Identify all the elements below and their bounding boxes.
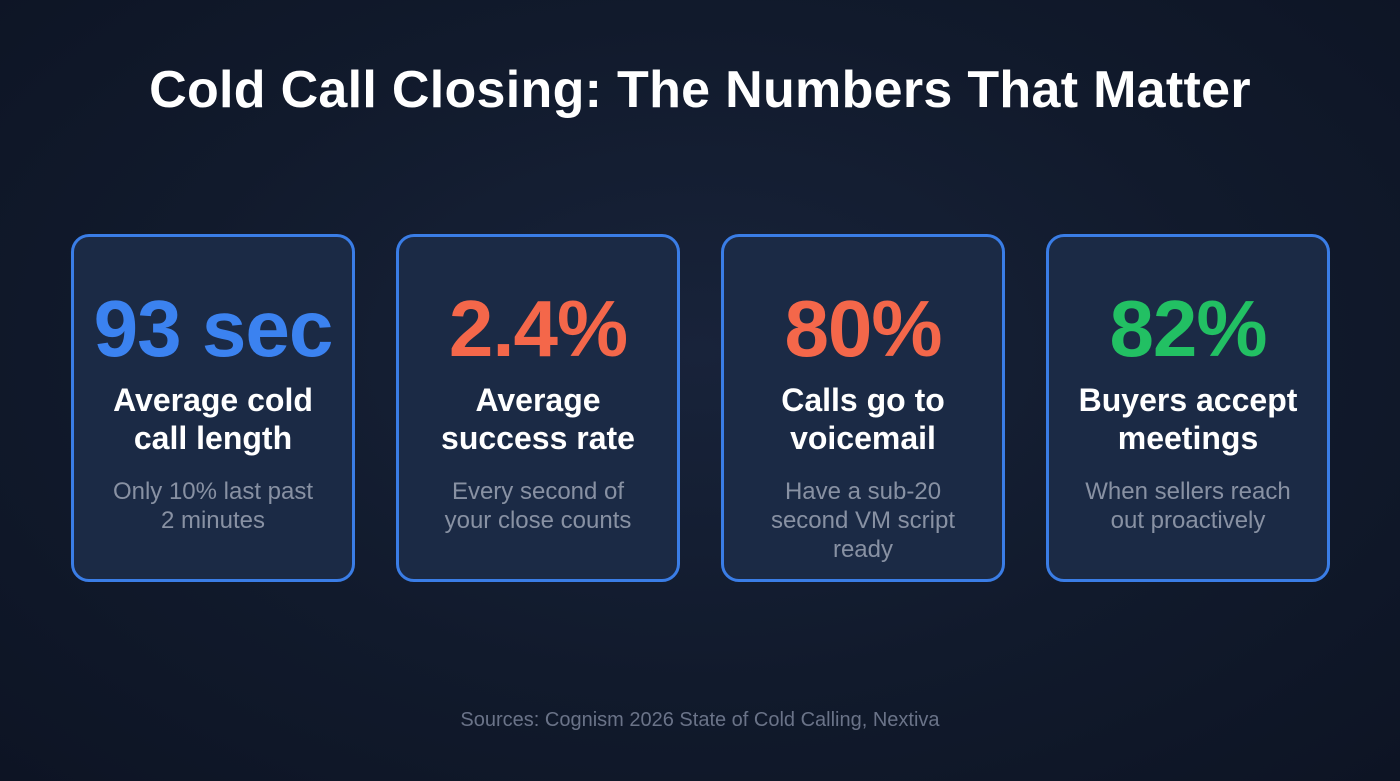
stat note: Every second of [452, 478, 624, 505]
stat number: 93 sec [94, 284, 332, 373]
stat label: call length [134, 420, 292, 456]
card: success rate [396, 234, 680, 582]
stat label [781, 382, 945, 456]
stat note: ready [833, 536, 893, 563]
stat label: Calls go to [781, 382, 945, 418]
stat note: your close counts [445, 507, 631, 534]
stat note: out proactively [1111, 507, 1265, 534]
stat label [1079, 382, 1298, 456]
card: call length [71, 234, 355, 582]
stat label: success rate [441, 420, 635, 456]
stat label [113, 382, 313, 456]
stat note: Only 10% last past [113, 478, 313, 505]
stat note: 2 minutes [161, 507, 265, 534]
stat number: 80% [784, 284, 942, 373]
title: Cold Call Closing: The Numbers That Matter [149, 61, 1251, 119]
stat note [444, 478, 631, 534]
card: voicemail [721, 234, 1005, 582]
stat number: 2.4% [449, 284, 627, 373]
card: meetings [1046, 234, 1330, 582]
stat label [441, 382, 635, 456]
stat note: Have a sub-20 [785, 478, 941, 505]
stat label: voicemail [790, 420, 936, 456]
stat label: Buyers accept [1079, 382, 1297, 418]
stat number: 82% [1109, 284, 1267, 373]
stat note [113, 478, 313, 534]
stat label: Average cold [113, 382, 313, 418]
stat note [1085, 478, 1291, 534]
stat label: meetings [1118, 420, 1258, 456]
sources: Sources: Cognism 2026 State of Cold Calling, Nextiva [460, 709, 940, 731]
stat note: second VM script [771, 507, 955, 534]
stat label: Average [475, 382, 601, 418]
stat note: When sellers reach [1085, 478, 1291, 505]
stat note [771, 478, 955, 563]
